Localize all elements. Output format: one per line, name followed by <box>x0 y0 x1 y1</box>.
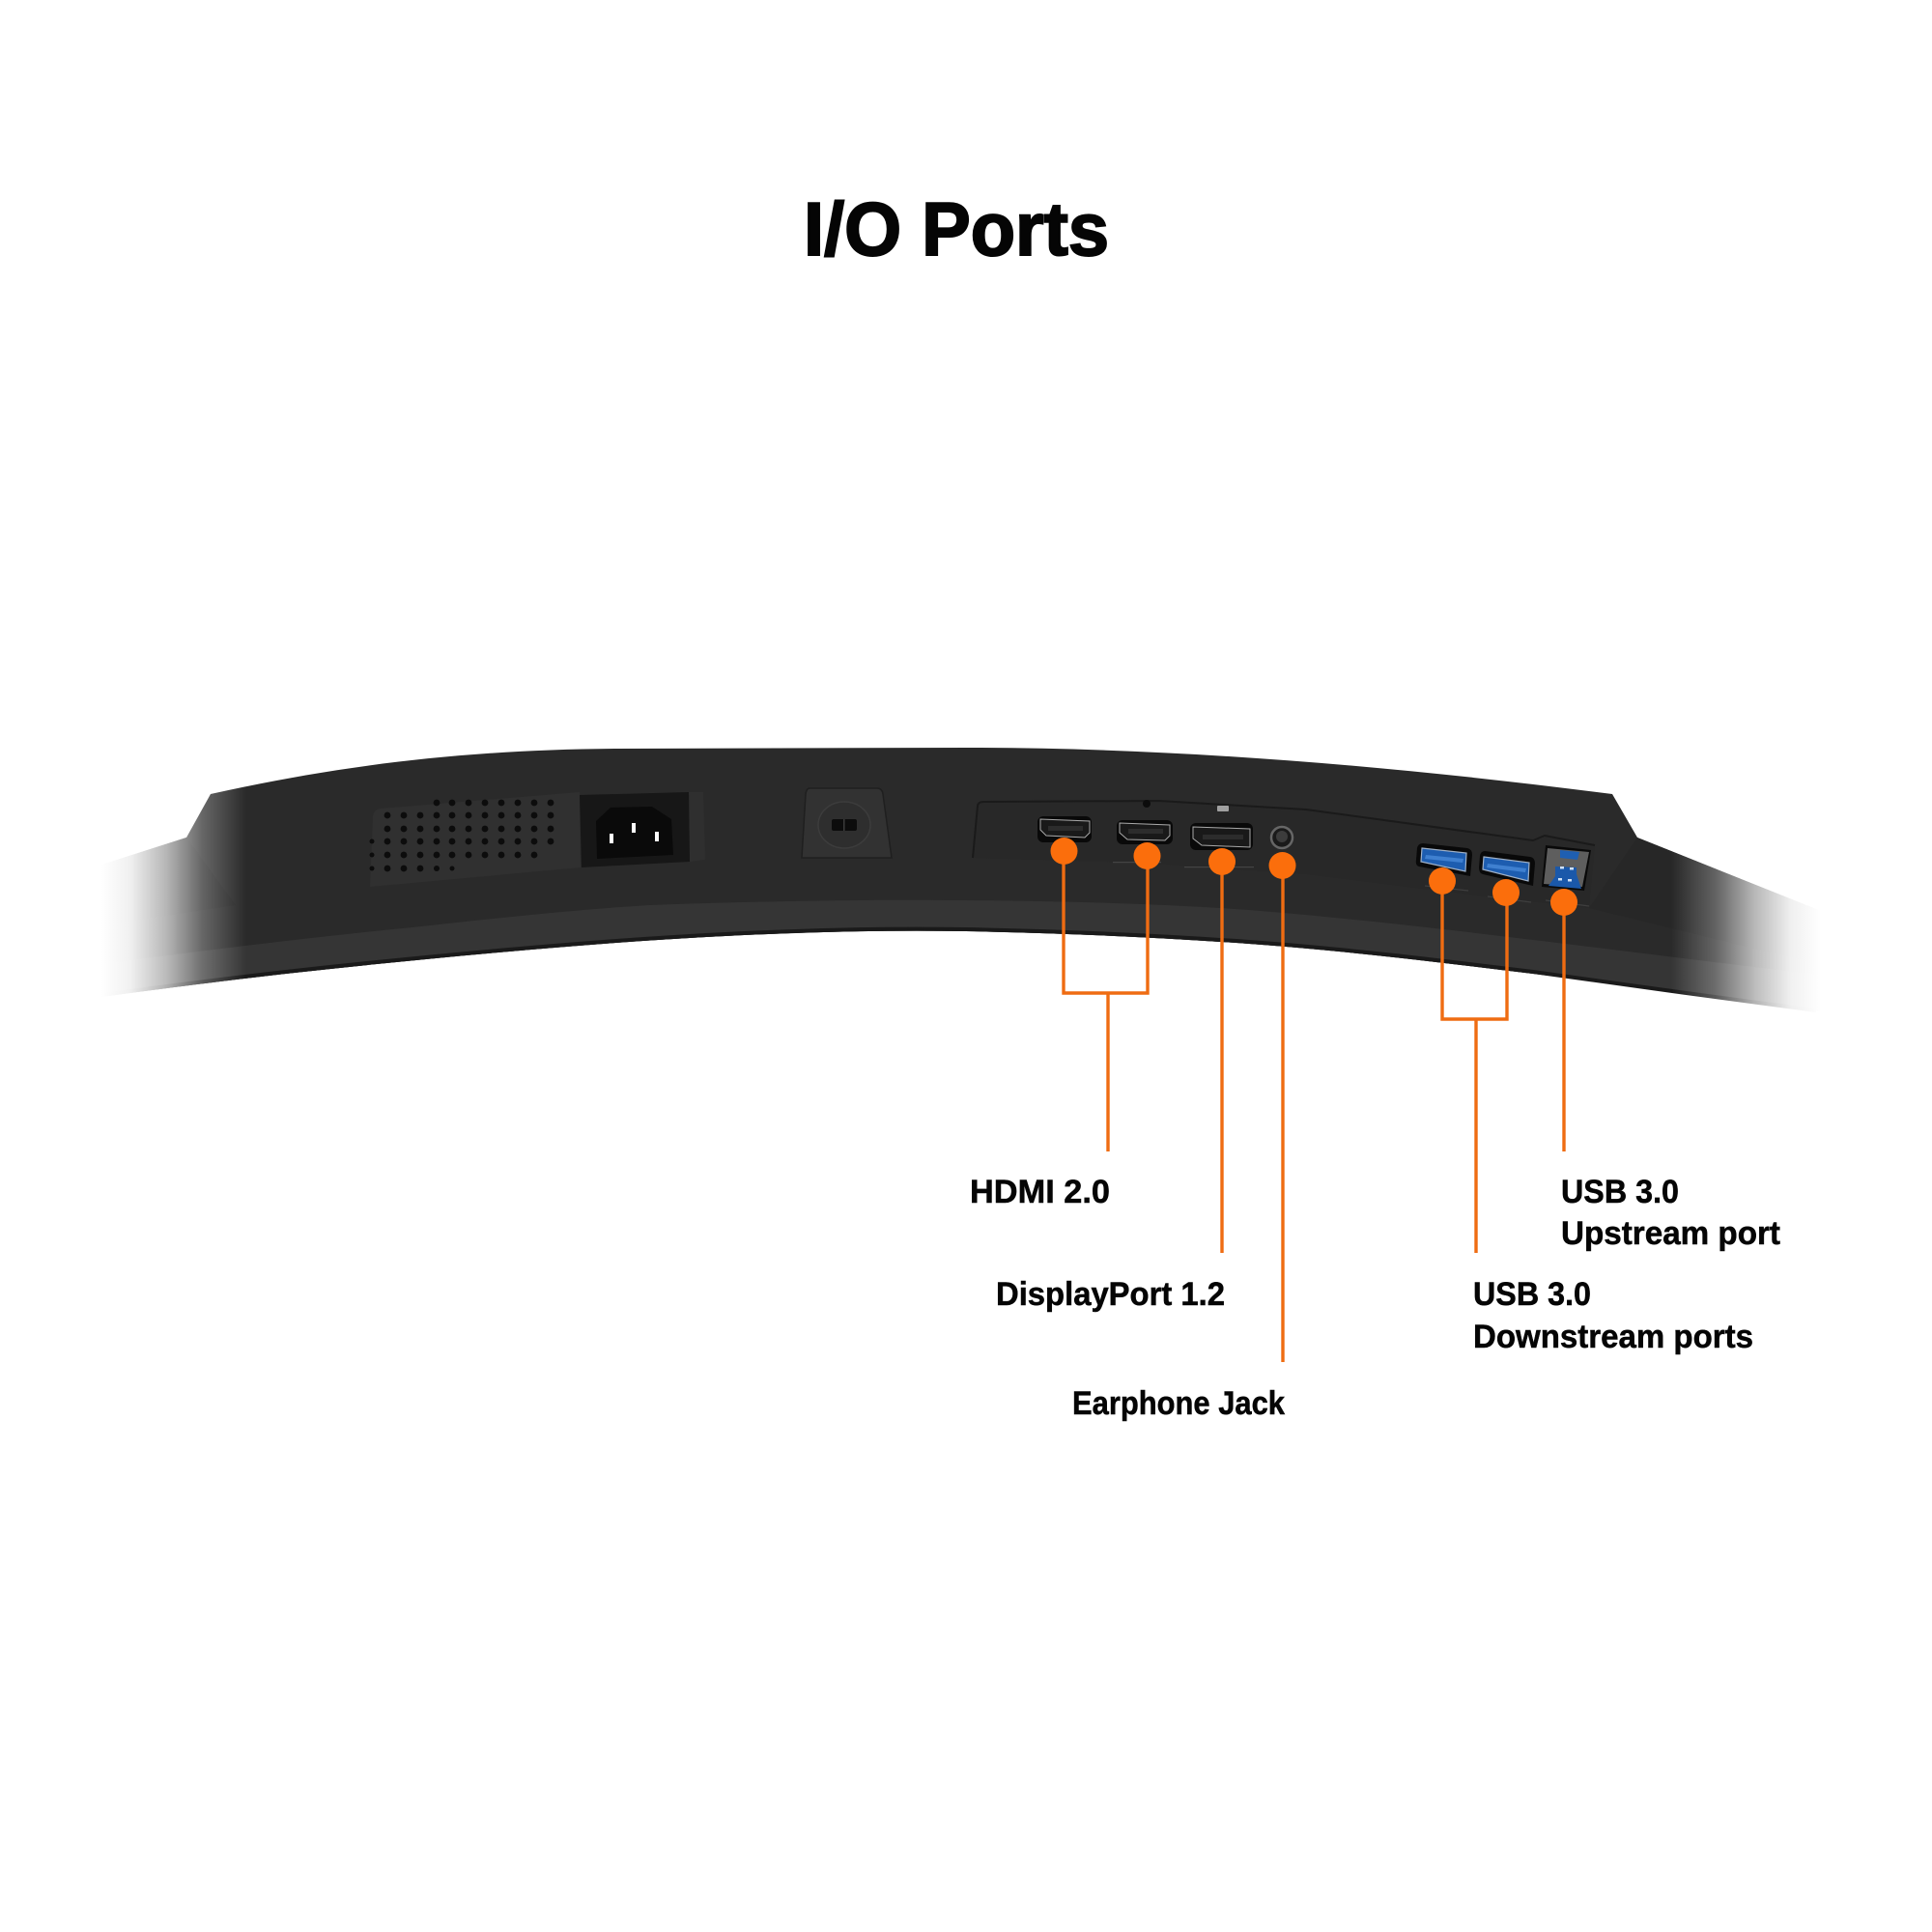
label: USB 3.0 Downstream ports: USB 3.0 <box>1473 1276 1591 1313</box>
label: USB 3.0 Downstream ports <box>1473 1276 1753 1355</box>
monitor underside body <box>58 748 1855 1024</box>
label: USB 3.0 Upstream port: USB 3.0 <box>1561 1174 1679 1210</box>
callout connector: HDMI bracket <box>1064 851 1148 1151</box>
label: DisplayPort 1.2: DisplayPort 1.2 <box>996 1276 1225 1313</box>
callout connector: USB upstream <box>1562 902 1566 1151</box>
lighter front band <box>87 900 1826 1013</box>
label: USB 3.0 Upstream port: Upstream port <box>1561 1215 1780 1252</box>
HDMI port 2 <box>1117 820 1173 844</box>
power socket <box>580 792 705 867</box>
USB 3.0 upstream port <box>1542 845 1591 891</box>
DisplayPort port <box>1190 823 1253 850</box>
USB 3.0 downstream port 2 <box>1479 851 1535 886</box>
label: USB 3.0 Downstream ports: Downstream ports <box>1473 1319 1753 1355</box>
port marker dots <box>1051 838 1577 916</box>
port panel recess <box>973 801 1595 908</box>
rear stand shading left <box>87 838 236 927</box>
monitor shell <box>87 748 1826 1013</box>
USB 3.0 downstream port 1 <box>1416 843 1472 876</box>
label: USB 3.0 Upstream port <box>1561 1174 1780 1252</box>
callout connector: earphone jack <box>1281 866 1285 1362</box>
callout connector: DisplayPort <box>1220 862 1224 1253</box>
dark lower edge <box>87 929 1816 1010</box>
label: Earphone Jack: Earphone Jack <box>1072 1385 1285 1422</box>
HDMI port 1 <box>1037 816 1092 842</box>
rear stand shading right <box>1589 838 1826 966</box>
vent grille panel <box>369 792 581 887</box>
callout connector: USB downstream bracket <box>1442 881 1507 1253</box>
label: HDMI 2.0: HDMI 2.0 <box>970 1174 1110 1210</box>
kensington lock plate <box>802 788 892 858</box>
socket pins <box>610 834 613 843</box>
title: I/O Ports <box>804 186 1109 271</box>
vent holes <box>369 800 554 871</box>
earphone jack <box>1271 827 1293 848</box>
small indent marks <box>1113 800 1589 906</box>
left edge fade <box>58 763 246 1014</box>
right edge fade <box>1671 763 1855 1024</box>
